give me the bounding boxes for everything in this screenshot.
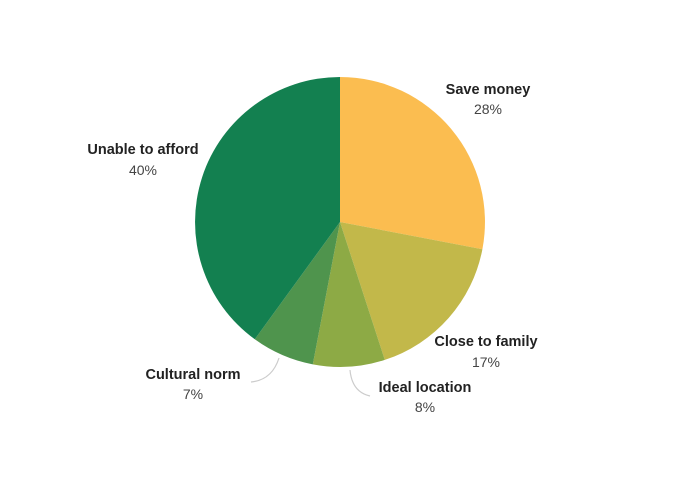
label: save money: 28%	[474, 101, 502, 117]
slice: save money	[340, 77, 485, 249]
leader line: cultural norm	[251, 358, 279, 382]
slice: ideal location	[313, 222, 385, 367]
label: save money	[446, 82, 530, 117]
label: ideal location: Ideal location	[379, 380, 471, 396]
label: unable to afford: 40%	[129, 162, 157, 178]
label: close to family: Close to family	[434, 334, 538, 350]
label: cultural norm: Cultural norm	[145, 367, 241, 383]
label: ideal location: 8%	[415, 399, 435, 415]
label: cultural norm	[145, 367, 241, 402]
label: save money: Save money	[446, 82, 530, 98]
slice: cultural norm	[255, 222, 340, 364]
pie chart	[195, 77, 485, 367]
leader line: ideal location	[350, 370, 370, 396]
label: close to family: 17%	[472, 354, 500, 370]
slice: unable to afford	[195, 77, 340, 339]
label: close to family	[434, 334, 538, 370]
label: cultural norm: 7%	[183, 386, 203, 402]
label: unable to afford: Unable to afford	[87, 142, 199, 158]
label: ideal location	[379, 380, 471, 415]
slice: close to family	[340, 222, 482, 360]
label: unable to afford	[87, 142, 199, 178]
